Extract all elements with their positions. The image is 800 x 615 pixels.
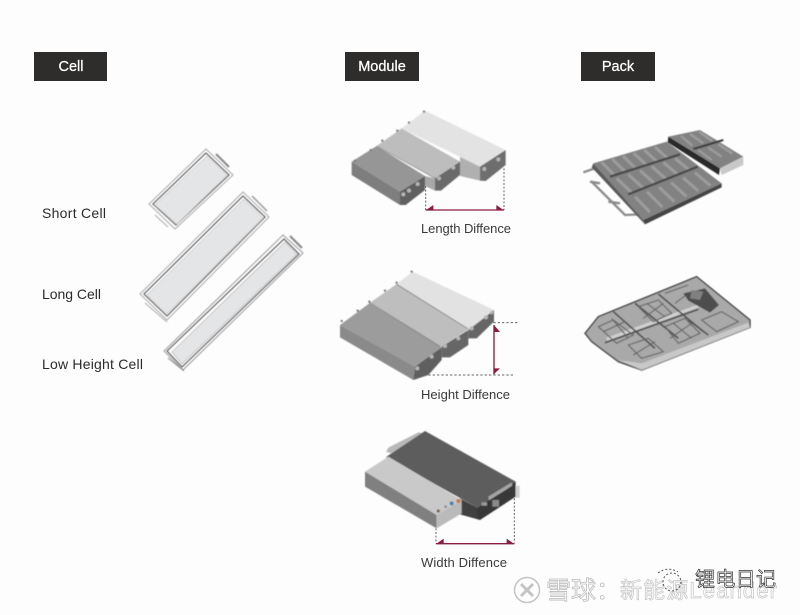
- label: Long Cell: Long Cell: [42, 286, 101, 302]
- heading: Module: Module: [358, 59, 406, 75]
- pack: open tray with modules: [583, 130, 743, 224]
- module: length difference: [352, 110, 506, 210]
- watermark text: new energy Leander: 新能源Leander: [620, 578, 777, 603]
- heading: Cell: [34, 52, 107, 81]
- label: Length Diffence: Length Diffence: [421, 221, 511, 236]
- watermark logo: [514, 578, 540, 602]
- icon: short cell: [149, 149, 233, 229]
- heading: Module: [345, 52, 419, 81]
- label: Low Height Cell: Low Height Cell: [42, 356, 143, 372]
- dimension arrow: height: [428, 323, 518, 375]
- illustration: three modules of different height: [340, 270, 494, 380]
- watermark text: Xueqiu: 雪球：: [546, 577, 621, 605]
- icon: low height cell: [164, 235, 303, 371]
- heading: Cell: Cell: [59, 59, 83, 75]
- illustration: two modules of different width: [365, 431, 520, 528]
- watermark bubble icon: [658, 569, 681, 591]
- label: Height Diffence: Height Diffence: [421, 387, 510, 402]
- dimension arrow: width: [436, 498, 514, 544]
- label: Width Diffence: Width Diffence: [421, 555, 507, 570]
- module: width difference: [365, 431, 520, 544]
- watermark: [514, 568, 777, 605]
- watermark text: lithium diary: 锂电日记: [695, 568, 776, 591]
- pack: lower case frame: [585, 277, 750, 370]
- icon: long cell: [140, 192, 269, 322]
- heading: Pack: [581, 52, 655, 81]
- label: Short Cell: Short Cell: [42, 205, 106, 221]
- module: height difference: [340, 270, 518, 380]
- illustration: three modules of different length: [352, 110, 506, 205]
- heading: Pack: Pack: [602, 59, 635, 75]
- dimension arrow: length: [426, 168, 504, 210]
